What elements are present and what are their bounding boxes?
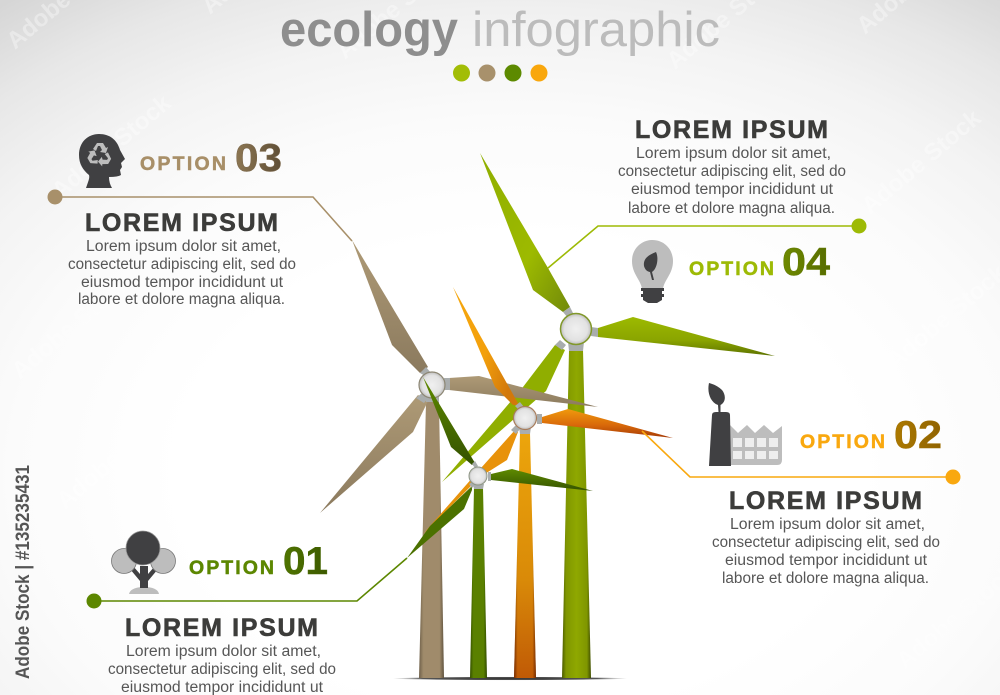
body text bbox=[618, 145, 846, 217]
option label: OPTION bbox=[140, 153, 226, 175]
body text: Lorem ipsum dolor sit amet, bbox=[636, 145, 831, 162]
turbine: brown bbox=[320, 240, 598, 678]
turbine: light green bbox=[442, 153, 775, 678]
option label: OPTION bbox=[189, 557, 274, 579]
body text: consectetur adipiscing elit, sed do bbox=[108, 661, 336, 678]
title bbox=[280, 3, 720, 57]
title: infographic bbox=[472, 3, 720, 57]
stock id label: Adobe Stock | #135235431 bbox=[12, 465, 34, 679]
ground shadow bbox=[392, 677, 628, 680]
option number: 02 bbox=[894, 414, 942, 457]
panel: option 03 bbox=[68, 134, 296, 308]
text: Adobe Stock bbox=[857, 104, 987, 220]
title colour dots bbox=[453, 64, 548, 82]
body text: eiusmod tempor incididunt ut bbox=[81, 274, 284, 291]
icon: factory with leaf smoke bbox=[708, 383, 782, 466]
connector: option 01 bbox=[86, 558, 407, 608]
icon: light bulb with leaf bbox=[632, 240, 673, 303]
body text: consectetur adipiscing elit, sed do bbox=[68, 256, 296, 273]
panel: option 02 bbox=[708, 383, 942, 587]
option label: OPTION bbox=[689, 258, 774, 280]
title: ecology bbox=[280, 3, 458, 57]
turbine: dark green bbox=[407, 377, 593, 678]
body text: labore et dolore magna aliqua. bbox=[78, 291, 285, 308]
panel: option 01 bbox=[108, 531, 336, 695]
text: Adobe Stock bbox=[47, 89, 177, 205]
icon: trees bbox=[112, 531, 176, 594]
panel: option 04 bbox=[618, 116, 846, 303]
body text: consectetur adipiscing elit, sed do bbox=[618, 163, 846, 180]
heading: LOREM IPSUM bbox=[635, 116, 828, 144]
body text: consectetur adipiscing elit, sed do bbox=[712, 534, 940, 551]
text: Adobe Stock bbox=[7, 269, 137, 385]
heading: LOREM IPSUM bbox=[85, 209, 278, 237]
body text: Lorem ipsum dolor sit amet, bbox=[730, 516, 925, 533]
connector: option 02 bbox=[642, 431, 960, 484]
text: Adobe Stock bbox=[52, 399, 182, 515]
option label: OPTION bbox=[800, 431, 885, 453]
connector: option 04 bbox=[548, 218, 866, 268]
body text: eiusmod tempor incididunt ut bbox=[725, 552, 928, 569]
heading: LOREM IPSUM bbox=[125, 614, 318, 642]
option number: 03 bbox=[235, 137, 282, 180]
heading: LOREM IPSUM bbox=[729, 487, 922, 515]
connector: option 03 bbox=[48, 190, 352, 241]
body text bbox=[108, 643, 336, 695]
option number: 04 bbox=[782, 241, 830, 284]
body text: labore et dolore magna aliqua. bbox=[628, 200, 835, 217]
body text: eiusmod tempor incididunt ut bbox=[631, 181, 834, 198]
body text: Lorem ipsum dolor sit amet, bbox=[126, 643, 321, 660]
body text bbox=[68, 238, 296, 308]
option number: 01 bbox=[283, 540, 328, 583]
body text: labore et dolore magna aliqua. bbox=[722, 570, 929, 587]
body text bbox=[712, 516, 940, 587]
turbine: orange bbox=[423, 287, 673, 678]
body text: Lorem ipsum dolor sit amet, bbox=[86, 238, 281, 255]
icon: head with recycling symbol bbox=[79, 134, 125, 188]
